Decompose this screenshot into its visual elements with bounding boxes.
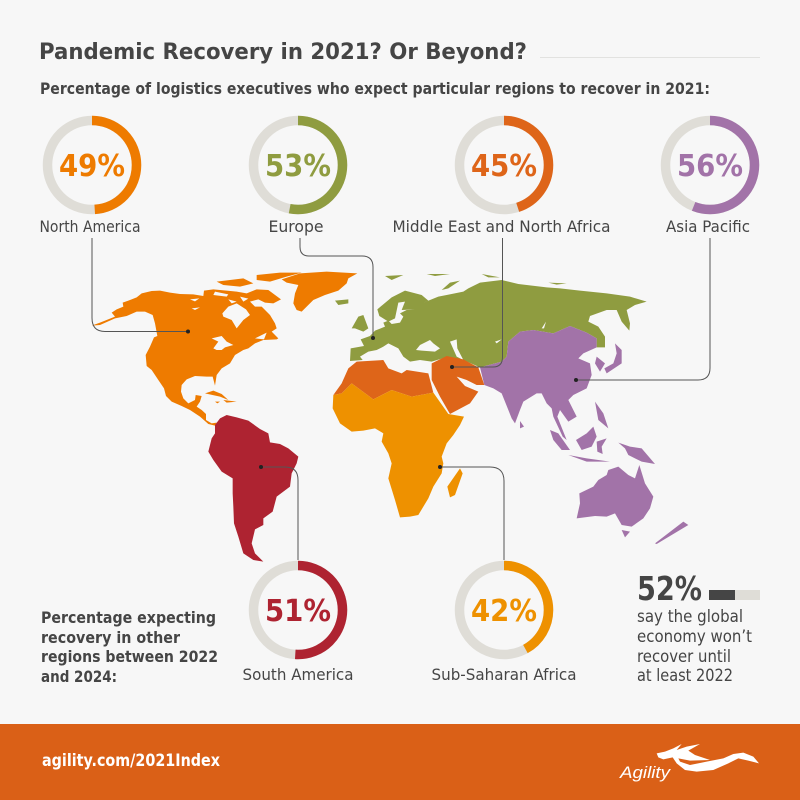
donut: Sub-Saharan Africa 42%: 42% xyxy=(471,594,537,629)
callout: 52% stat: 52% xyxy=(637,569,702,608)
leader: Europe xyxy=(300,238,375,340)
donut: South America 51%: 51% xyxy=(265,594,331,629)
donut: Sub-Saharan Africa 42% xyxy=(432,566,576,684)
donut: Europe 53%: 53% xyxy=(265,149,331,184)
donut: Europe 53%: Europe xyxy=(268,217,324,236)
callout: 52% stat xyxy=(637,569,760,685)
map: Europe and Russia xyxy=(335,274,647,367)
leader: Sub-Saharan Africa xyxy=(438,465,504,560)
stat bar xyxy=(709,590,760,600)
donut: Middle East and North Africa 45%: 45% xyxy=(471,149,537,184)
map: North America xyxy=(92,272,357,426)
footer band xyxy=(0,724,800,800)
donut: North America 49% xyxy=(40,120,140,236)
callout: 52% stat: recover until xyxy=(637,647,731,666)
world map xyxy=(92,272,688,562)
donut: Middle East and North Africa 45% xyxy=(392,120,610,236)
donut: Sub-Saharan Africa 42%: Sub-Saharan Africa xyxy=(432,665,576,684)
text: other regions note: Percentage expecting xyxy=(41,608,216,627)
callout: 52% stat: say the global xyxy=(637,607,743,626)
donut: Asia Pacific 56%: 56% xyxy=(677,149,743,184)
map: Sub-Saharan Africa xyxy=(333,383,464,517)
leader: Middle East and North Africa xyxy=(450,238,502,369)
text: other regions note: regions between 2022 xyxy=(41,647,218,666)
text: other regions note: recovery in other xyxy=(41,628,180,647)
donut: Europe 53% xyxy=(254,120,342,236)
leader: North America xyxy=(92,238,190,334)
donut: North America 49%: North America xyxy=(40,217,140,236)
donut: Middle East and North Africa 45%: Middle East and North Africa xyxy=(392,217,610,236)
logo: Agility: Agility xyxy=(619,763,672,782)
donut: Asia Pacific 56%: Asia Pacific xyxy=(666,217,750,236)
leader: South America xyxy=(259,465,298,560)
callout: 52% stat: economy won’t xyxy=(637,627,752,646)
map: Middle East and North Africa xyxy=(333,356,484,414)
title: Pandemic Recovery in 2021? Or Beyond? xyxy=(39,39,527,65)
text: other regions note xyxy=(41,608,218,686)
subtitle: Percentage of logistics executives who expect particular regions to recover in 2021: xyxy=(40,79,710,98)
footer link: agility.com/2021Index xyxy=(42,751,220,771)
leader: Asia Pacific xyxy=(574,238,710,382)
donut: South America 51% xyxy=(242,566,354,684)
donut: South America 51%: South America xyxy=(242,665,354,684)
map: South America xyxy=(208,415,298,562)
donut: North America 49%: 49% xyxy=(59,149,125,184)
callout: 52% stat: at least 2022 xyxy=(637,666,733,685)
donut: Asia Pacific 56% xyxy=(666,120,754,236)
text: other regions note: and 2024: xyxy=(41,667,117,686)
map: Asia Pacific xyxy=(480,326,688,544)
logo: Agility xyxy=(619,744,759,782)
